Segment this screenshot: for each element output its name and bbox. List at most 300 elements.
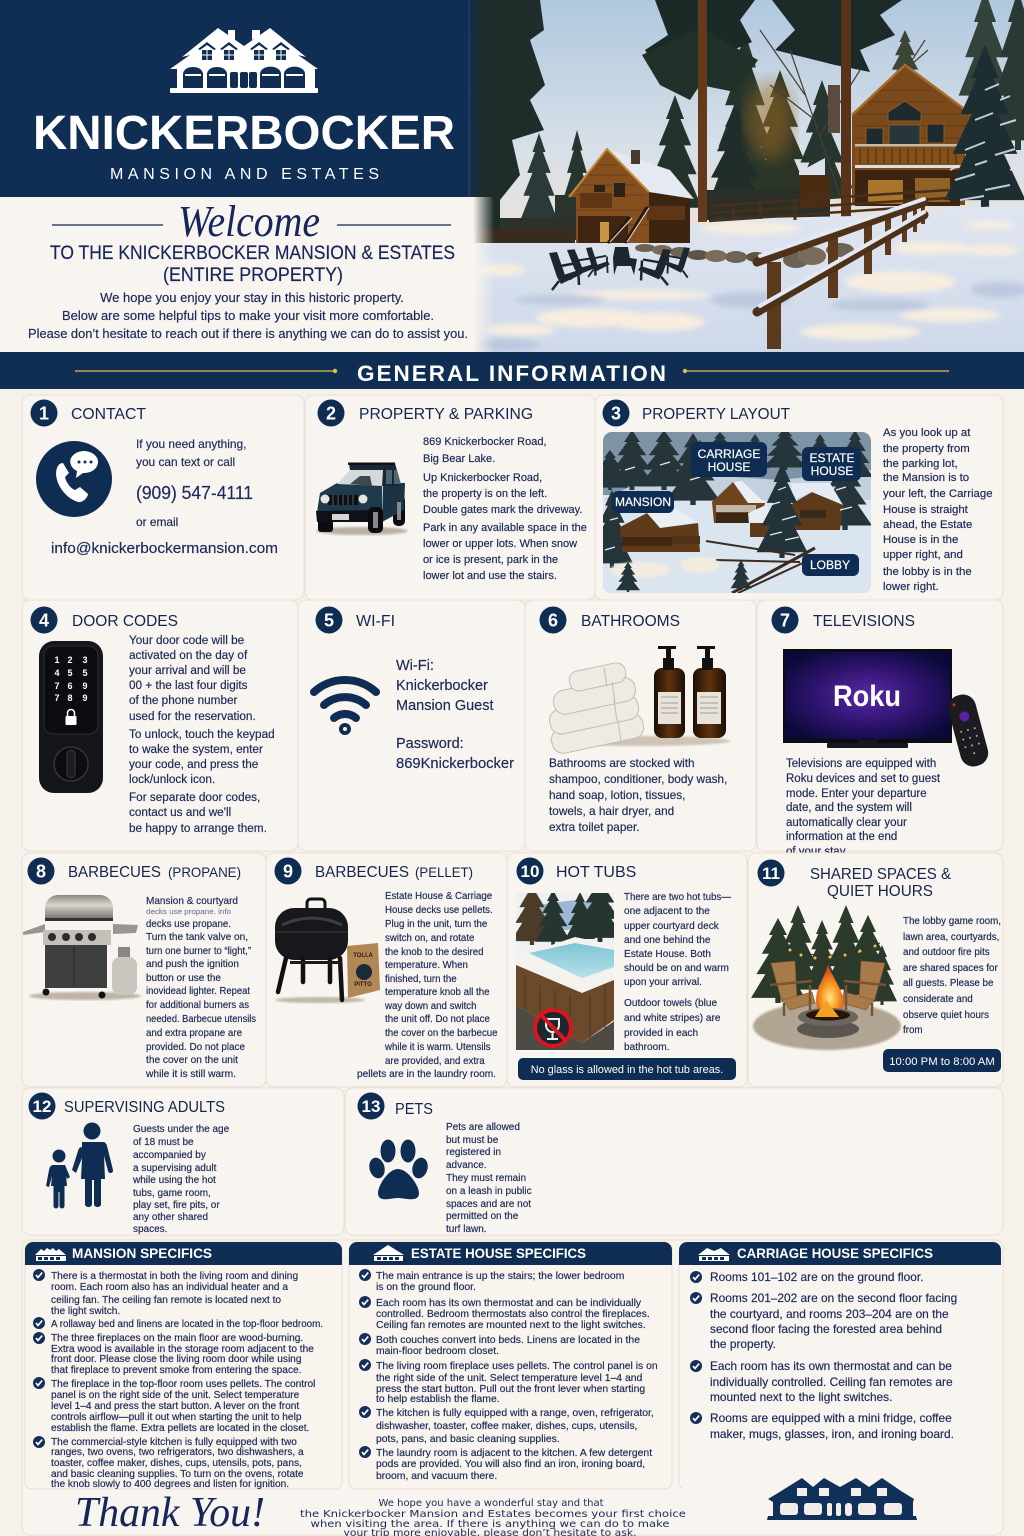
- icon: paw print: [367, 1140, 430, 1199]
- carriage list: maker, mugs, glasses, iron, and ironing board.: [710, 1427, 954, 1441]
- parking text: 869 Knickerbocker Road,: [423, 436, 547, 448]
- icon: keypad smart lock: 5: [67, 668, 73, 678]
- estate list: The main entrance is up the stairs; the lower bedroom: [376, 1271, 624, 1282]
- section band: general information: [0, 352, 1024, 389]
- propane text: and push the ignition: [146, 959, 239, 970]
- pets text: permitted on the: [446, 1211, 519, 1222]
- estate list: The laundry room is adjacent to the kitchen. A few detergent: [376, 1448, 652, 1459]
- shared spaces text: and outdoor fire pits: [903, 947, 990, 958]
- supervising text: accompanied by: [133, 1150, 206, 1161]
- door code text: To unlock, touch the keypad: [129, 728, 275, 741]
- pellet text: the cover on the barbecue: [385, 1028, 498, 1039]
- hot tub text: and white stripes) are: [624, 1013, 721, 1024]
- bathrooms text: extra toilet paper.: [549, 820, 640, 834]
- ground snow: [460, 205, 1024, 352]
- welcome intro text: Please don’t hesitate to reach out if there is anything we can do to assist you.: [28, 326, 468, 341]
- panel 6: bathrooms: 6: [548, 610, 558, 630]
- contact text: (909) 547-4111: [136, 483, 253, 503]
- welcome intro text: [28, 290, 468, 341]
- panel 13: pets: PETS: [395, 1101, 433, 1118]
- title: KNICKERBOCKER: [33, 107, 455, 160]
- pellet text: temperature knob all the: [385, 987, 489, 998]
- mansion list: that fireplace to prevent smoke from entering the space.: [51, 1365, 301, 1376]
- pellet text: [357, 891, 498, 1080]
- estate list: Both couches convert into beds. Linens are located in the: [376, 1335, 640, 1346]
- panel 8: propane barbecues: (PROPANE): [168, 864, 241, 880]
- pets text: on a leash in public: [446, 1186, 532, 1197]
- pellet text: House decks use pellets.: [385, 905, 493, 916]
- hot tub text: upper courtyard deck: [624, 921, 720, 932]
- panel 1: contact: 1: [39, 404, 49, 424]
- panel 9: pellet barbecues: [266, 853, 507, 1087]
- panel 2: property and parking: [305, 395, 595, 600]
- welcome intro text: Below are some helpful tips to make your visit more comfortable.: [62, 308, 434, 323]
- mansion list: Extra wood is available in the storage room adjacent to the: [51, 1344, 314, 1355]
- layout text: [883, 427, 993, 593]
- pellet text: the knob to the desired: [385, 947, 484, 958]
- bathrooms text: Bathrooms are stocked with: [549, 756, 695, 770]
- footer message: when visiting the area. If there is anything we can do to make: [310, 1519, 670, 1530]
- parking text: the property is on the left.: [423, 488, 547, 500]
- parking text: lower or upper lots. When snow: [423, 538, 577, 550]
- panel 10: hot tubs: 10: [521, 862, 539, 881]
- parking text: Park in any available space in the: [423, 522, 587, 534]
- wifi credentials: Password:: [396, 736, 464, 752]
- pets text: They must remain: [446, 1173, 526, 1184]
- estate list: Each room has its own thermostat and can be individually: [376, 1298, 642, 1309]
- welcome panel: [0, 197, 494, 352]
- door code text: used for the reservation.: [129, 710, 256, 723]
- hot tub text: one adjacent to the: [624, 906, 710, 917]
- propane text: while it is still warm.: [145, 1069, 236, 1080]
- bare tree: [760, 30, 928, 195]
- icon: pellet grill with bag: TOLI.A: [353, 953, 373, 959]
- televisions text: date, and the system will: [786, 802, 912, 814]
- mansion list: level 1–4 and press the start button. A lever on the front: [51, 1401, 299, 1412]
- shared spaces text: lawn area, courtyards,: [903, 932, 999, 943]
- subtitle: MANSION AND ESTATES: [110, 166, 379, 183]
- estate list: broom, and vacuum there.: [376, 1471, 497, 1482]
- layout text: the lobby is in the: [883, 566, 972, 578]
- icon: no glass sign: [535, 1010, 571, 1046]
- panel: mansion specifics: [25, 1242, 342, 1490]
- tall left tree: [470, 0, 545, 240]
- panel 10: hot tubs: [507, 853, 747, 1087]
- label: estate house: HOUSE: [811, 464, 853, 478]
- header bar: ESTATE HOUSE SPECIFICS: [411, 1245, 586, 1261]
- header bar: MANSION SPECIFICS: [72, 1245, 212, 1261]
- propane text: turn one burner to “light,”: [146, 946, 251, 957]
- panel 8: propane barbecues: [22, 853, 266, 1087]
- panel 5: wi-fi: WI-FI: [356, 613, 395, 630]
- hot tub text: bathroom.: [624, 1042, 669, 1053]
- pellet text: while it is warm. Utensils: [384, 1042, 491, 1053]
- panel 5: wi-fi: [298, 600, 525, 851]
- televisions text: automatically clear your: [786, 817, 907, 829]
- propane text: Turn the tank valve on,: [146, 932, 248, 943]
- hot tub text: upon your arrival.: [624, 977, 702, 988]
- panel 8: propane barbecues: BARBECUES: [68, 864, 161, 881]
- televisions text: of your stay.: [786, 846, 848, 858]
- contact text: [51, 437, 278, 557]
- aerial illustration with labels: [591, 428, 873, 593]
- estate list: main-floor bedroom closet.: [376, 1346, 499, 1357]
- wifi credentials: Knickerbocker: [396, 678, 488, 694]
- header bar: [349, 1242, 672, 1265]
- hot tub text: [624, 892, 732, 1053]
- illustration: fire pit and chairs: [751, 905, 901, 1050]
- panel 12: supervising adults: SUPERVISING ADULTS: [64, 1099, 225, 1116]
- hot tub text: provided in each: [624, 1028, 698, 1039]
- label: carriage house: CARRIAGE: [698, 447, 760, 461]
- mansion list: front door. Please close the living room door while using: [51, 1354, 301, 1365]
- mansion list: The commercial-style kitchen is fully equipped with two: [51, 1437, 297, 1448]
- icon: keypad smart lock: [39, 641, 103, 793]
- panel 7: televisions: TELEVISIONS: [813, 613, 915, 630]
- door code text: [129, 634, 275, 835]
- estate list: The living room fireplace uses pellets. The control panel is on: [376, 1361, 658, 1372]
- panel 9: pellet barbecues: (PELLET): [415, 864, 473, 880]
- panel 3: property layout: 3: [611, 404, 621, 424]
- panel 3: property layout: [591, 395, 1003, 600]
- illustration: hot tub with no-glass sign: [516, 893, 614, 1050]
- hot tub text: and one behind the: [624, 935, 711, 946]
- estate list: [376, 1271, 658, 1482]
- heading: [810, 866, 951, 900]
- televisions text: [786, 758, 941, 858]
- carriage list: the property.: [710, 1337, 776, 1351]
- televisions text: Televisions are equipped with: [786, 758, 936, 770]
- panel 4: door codes: DOOR CODES: [72, 613, 178, 630]
- back fence: [709, 190, 949, 221]
- carriage list: second floor facing the forested area behind: [710, 1322, 942, 1336]
- mansion list: The fireplace in the top-floor room uses pellets. The control: [51, 1379, 315, 1390]
- televisions text: Roku devices and set to guest: [786, 773, 941, 785]
- hot tub text: Outdoor towels (blue: [624, 998, 718, 1009]
- panel 13: pets: 13: [362, 1097, 380, 1116]
- cabins: [712, 482, 765, 523]
- logo: white mansion silhouette: [170, 28, 318, 93]
- icon: keypad smart lock: 6: [67, 681, 73, 691]
- supervising text: of 18 must be: [133, 1137, 194, 1148]
- layout text: the property from: [883, 443, 970, 455]
- panel 2: property and parking: 2: [326, 404, 336, 424]
- pellet text: are provided, and extra: [385, 1056, 485, 1067]
- pellet text: pellets are in the laundry room.: [357, 1069, 496, 1080]
- panel 2: property and parking: PROPERTY & PARKING: [359, 406, 533, 423]
- propane text: and extra propane are: [146, 1028, 242, 1039]
- panel 7: televisions: [757, 600, 1003, 858]
- snow fir on right: [944, 45, 1024, 210]
- panel 1: contact: CONTACT: [71, 406, 146, 423]
- layout text: lower right.: [883, 581, 939, 593]
- icon: keypad smart lock: 8: [67, 693, 73, 703]
- supervising text: [132, 1124, 230, 1235]
- supervising text: while using the hot: [132, 1175, 216, 1186]
- contact text: info@knickerbockermansion.com: [51, 540, 278, 557]
- contact text: you can text or call: [136, 455, 235, 469]
- pets text: [446, 1122, 532, 1235]
- heading: QUIET HOURS: [827, 883, 933, 900]
- back forest: [564, 130, 587, 195]
- estate list: Ceiling fan remotes are mounted next to the light switches.: [376, 1320, 646, 1331]
- propane text: needed. Barbecue utensils: [146, 1014, 256, 1025]
- panel: carriage house specifics: [679, 1242, 1001, 1489]
- icon: keypad smart lock: 9: [82, 681, 88, 691]
- mansion list: the light switch.: [51, 1306, 120, 1317]
- layout text: ahead, the Estate: [883, 519, 972, 531]
- mansion list: A rollaway bed and linens are located in the top-floor bedroom.: [51, 1319, 323, 1330]
- contact text: or email: [136, 515, 178, 529]
- welcome script: Welcome: [178, 197, 320, 246]
- parking text: or ice is present, park in the: [423, 554, 558, 566]
- second tall pine: [772, 0, 902, 72]
- mansion list: establish the flame. Extra pellets are located in the closet.: [51, 1423, 309, 1434]
- bottom frame: [22, 1240, 1003, 1535]
- icon: keypad smart lock: 3: [82, 655, 88, 665]
- mansion list: ranges, two ovens, two refrigerators, two dishwashers, a: [51, 1447, 304, 1458]
- mansion list: controls airflow—pull it out when starting the unit to help: [51, 1412, 302, 1423]
- estate list: pots, pans, and basic cleaning supplies.: [376, 1434, 560, 1445]
- panel 11: shared spaces and quiet hours: [748, 853, 1003, 1087]
- welcome heading: TO THE KNICKERBOCKER MANSION & ESTATES: [50, 243, 455, 264]
- icon: keypad smart lock: 5: [82, 668, 88, 678]
- shared spaces text: [903, 916, 1001, 1036]
- supervising text: any other shared: [133, 1212, 208, 1223]
- label: carriage house: [691, 442, 767, 477]
- icon: propane grill: [23, 895, 141, 1000]
- panel 12: supervising adults: 12: [33, 1097, 51, 1116]
- footer icon: navy estate silhouette: [767, 1478, 917, 1520]
- panel: estate house specifics: [349, 1242, 672, 1489]
- carriage list: Rooms 101–102 are on the ground floor.: [710, 1270, 924, 1284]
- callout: quiet hours: [883, 1049, 1001, 1072]
- footer message: We hope you have a wonderful stay and that: [378, 1498, 604, 1509]
- footer message: [300, 1498, 686, 1536]
- footer message: the Knickerbocker Mansion and Estates becomes your first choice: [300, 1509, 686, 1520]
- pets text: spaces and are not: [446, 1199, 531, 1210]
- mansion list: [51, 1271, 323, 1490]
- propane text: [145, 896, 256, 1080]
- estate list: press the start button. Pull out the front lever when starting: [376, 1384, 645, 1395]
- callout: quiet hours: 10:00 PM to 8:00 AM: [889, 1056, 995, 1068]
- right cabin: [799, 65, 979, 207]
- estate list: controlled. Bedroom thermostats also control the fireplaces.: [376, 1309, 650, 1320]
- pellet text: way down and switch: [384, 1001, 477, 1012]
- icon: keypad smart lock: 1: [54, 655, 60, 665]
- door code text: For separate door codes,: [129, 791, 260, 804]
- door code text: your arrival and will be: [129, 664, 246, 677]
- mansion list: The three fireplaces on the main floor are wood-burning.: [51, 1333, 303, 1344]
- bathrooms text: [549, 756, 727, 834]
- propane text: for additional burners as: [146, 1000, 249, 1011]
- propane text: Mansion & courtyard: [146, 896, 238, 907]
- estate list: to help establish the flame.: [376, 1394, 500, 1405]
- estate list: dishwasher, toaster, coffee maker, dishes, cups, utensils,: [376, 1421, 637, 1432]
- carriage list: Rooms 201–202 are on the second floor facing: [710, 1291, 957, 1305]
- panel 8: propane barbecues: 8: [36, 862, 46, 882]
- header bar: [25, 1242, 342, 1265]
- mansion list: panel is on the right side of the unit. Select temperature: [51, 1390, 300, 1401]
- carriage list: Rooms are equipped with a mini fridge, coffee: [710, 1411, 952, 1425]
- icon: keypad smart lock: 9: [82, 693, 88, 703]
- hot tub text: should be on and warm: [624, 963, 729, 974]
- supervising text: Guests under the age: [133, 1124, 230, 1135]
- icon: pellet grill with bag: PITTO: [354, 982, 372, 988]
- icon: wifi: [314, 680, 376, 731]
- pellet text: the unit off. Do not place: [385, 1014, 490, 1025]
- parking text: Big Bear Lake.: [423, 453, 495, 465]
- panel 9: pellet barbecues: BARBECUES: [315, 864, 409, 881]
- icon: keypad smart lock: 7: [54, 693, 60, 703]
- panel 3: property layout: PROPERTY LAYOUT: [642, 406, 790, 423]
- stone wall: [635, 243, 854, 268]
- bathrooms text: hand soap, lotion, tissues,: [549, 788, 685, 802]
- shared spaces text: observe quiet hours: [903, 1010, 989, 1021]
- propane text: decks use propane.: [146, 919, 231, 930]
- door code text: Your door code will be: [129, 634, 245, 647]
- callout: no glass: [518, 1058, 736, 1080]
- callout: no glass: No glass is allowed in the hot tub areas.: [531, 1064, 723, 1076]
- icon: phone with speech bubble: [36, 441, 112, 517]
- parking text: Up Knickerbocker Road,: [423, 472, 542, 484]
- label: mansion: [612, 491, 674, 513]
- header panel: navy logo block: [0, 0, 482, 197]
- pets text: advance.: [446, 1160, 487, 1171]
- panel 6: bathrooms: BATHROOMS: [581, 613, 680, 630]
- hot tub text: There are two hot tubs—: [624, 892, 732, 903]
- panel 5: wi-fi: 5: [324, 610, 334, 630]
- shared spaces text: The lobby game room,: [903, 916, 1001, 927]
- layout text: upper right, and: [883, 549, 963, 561]
- pellet text: switch on, and rotate: [385, 933, 474, 944]
- door code text: be happy to arrange them.: [129, 822, 267, 835]
- panel 4: door codes: 4: [39, 610, 49, 630]
- layout text: the parking lot,: [883, 458, 958, 470]
- panel 4: door codes: [22, 600, 298, 851]
- door code text: lock/unlock icon.: [129, 773, 215, 786]
- supervising text: play set, fire pits, or: [133, 1200, 220, 1211]
- panel 6: bathrooms: [525, 600, 756, 851]
- icon: SUV: [316, 462, 408, 535]
- heading: SHARED SPACES &: [810, 866, 951, 883]
- icon: keypad smart lock: 2: [67, 655, 73, 665]
- parking text: Double gates mark the driveway.: [423, 504, 582, 516]
- welcome panel: (ENTIRE PROPERTY): [163, 265, 343, 286]
- hot tub text: Estate House. Both: [624, 949, 711, 960]
- footer: thank you script: Thank You!: [75, 1490, 265, 1536]
- mansion list: toaster, coffee maker, dishes, cups, utensils, pots, pans,: [51, 1458, 302, 1469]
- parking text: [423, 436, 587, 582]
- warm sunlit patches: [475, 221, 1020, 340]
- supervising text: tubs, game room,: [133, 1188, 211, 1199]
- adirondack chairs: [549, 247, 690, 290]
- mansion list: and basic cleaning supplies. To turn on the ovens, rotate: [51, 1469, 304, 1480]
- mansion list: room. Each room also has an individual heater and a: [51, 1282, 288, 1293]
- shared spaces text: from: [903, 1025, 923, 1036]
- panel 7: televisions: 7: [780, 610, 790, 630]
- layout text: your left, the Carriage: [883, 488, 993, 500]
- icon: TV with Roku screen: Roku: [833, 680, 901, 713]
- header bar: CARRIAGE HOUSE SPECIFICS: [737, 1245, 933, 1261]
- label: lobby: [802, 554, 859, 576]
- panel 1: contact: [22, 395, 304, 600]
- pellet text: finished, turn the: [385, 974, 457, 985]
- layout text: As you look up at: [883, 427, 971, 439]
- foreground log fence: [767, 200, 925, 349]
- label: estate house: [802, 447, 861, 481]
- left cabin: [460, 149, 694, 243]
- carriage list: the courtyard, and rooms 203–204 are on the: [710, 1307, 949, 1321]
- door code text: of the phone number: [129, 694, 238, 707]
- parking text: lower lot and use the stairs.: [423, 570, 557, 582]
- door code text: contact us and we'll: [129, 806, 231, 819]
- layout text: House is in the: [883, 534, 958, 546]
- label: mansion: MANSION: [615, 495, 671, 509]
- contact text: If you need anything,: [136, 437, 246, 451]
- pets text: Pets are allowed: [446, 1122, 520, 1133]
- panel 12: supervising adults: [22, 1088, 344, 1235]
- supervising text: spaces.: [133, 1224, 167, 1235]
- estate list: is on the ground floor.: [376, 1282, 476, 1293]
- icon: keypad smart lock: 4: [54, 668, 60, 678]
- bathrooms text: shampoo, conditioner, body wash,: [549, 772, 727, 786]
- label: estate house: ESTATE: [810, 451, 854, 465]
- welcome intro text: We hope you enjoy your stay in this historic property.: [100, 290, 404, 305]
- section band: general information: GENERAL INFORMATION: [357, 361, 666, 386]
- carriage list: mounted next to the light switches.: [710, 1390, 892, 1404]
- carriage list: Each room has its own thermostat and can be: [710, 1359, 952, 1373]
- mansion list: the knob slowly to 400 degrees and listen for ignition.: [51, 1479, 289, 1490]
- televisions text: mode. Enter your departure: [786, 788, 927, 800]
- icon: remote: [945, 692, 991, 769]
- label: carriage house: HOUSE: [708, 460, 750, 474]
- carriage list: [710, 1270, 957, 1441]
- supervising text: a supervising adult: [133, 1163, 217, 1174]
- estate list: The kitchen is fully equipped with a range, oven, refrigerator,: [376, 1408, 654, 1419]
- wifi credentials: Mansion Guest: [396, 698, 494, 714]
- pellet text: temperature. When: [385, 960, 468, 971]
- icon: adult and child: [46, 1122, 113, 1208]
- estate list: pods are provided. You will also find an iron, ironing board,: [376, 1459, 645, 1470]
- pets text: turf lawn.: [446, 1224, 487, 1235]
- door code text: activated on the day of: [129, 649, 248, 662]
- mansion list: ceiling fan. The ceiling fan remote is located next to: [51, 1295, 281, 1306]
- wifi credentials: Wi-Fi:: [396, 658, 434, 674]
- door code text: 00 + the last four digits: [129, 679, 248, 692]
- shared spaces text: all guests. Please be: [903, 978, 994, 989]
- panel 13: pets: [345, 1088, 1003, 1235]
- pets text: registered in: [446, 1147, 501, 1158]
- label: lobby: LOBBY: [810, 558, 850, 572]
- carriage list: individually controlled. Ceiling fan remotes are: [710, 1375, 953, 1389]
- propane text: decks use propane. info: [146, 907, 231, 916]
- pellet text: Plug in the unit, turn the: [385, 919, 487, 930]
- icon: pellet grill with bag: [275, 899, 380, 1003]
- door code text: to wake the system, enter: [129, 743, 263, 756]
- propane text: the cover on the unit: [146, 1055, 238, 1066]
- shared spaces text: are shared spaces for: [903, 963, 998, 974]
- layout text: House is straight: [883, 504, 969, 516]
- icon: keypad smart lock: 7: [54, 681, 60, 691]
- panel 9: pellet barbecues: 9: [283, 862, 293, 882]
- door code text: your code, and press the: [129, 758, 259, 771]
- panel 10: hot tubs: HOT TUBS: [556, 864, 636, 881]
- shared spaces text: considerate and: [903, 994, 973, 1005]
- hero photo: snowy cabins among pines: [460, 0, 1024, 352]
- pellet text: Estate House & Carriage: [385, 891, 492, 902]
- propane text: inovidead lighter. Repeat: [146, 986, 250, 997]
